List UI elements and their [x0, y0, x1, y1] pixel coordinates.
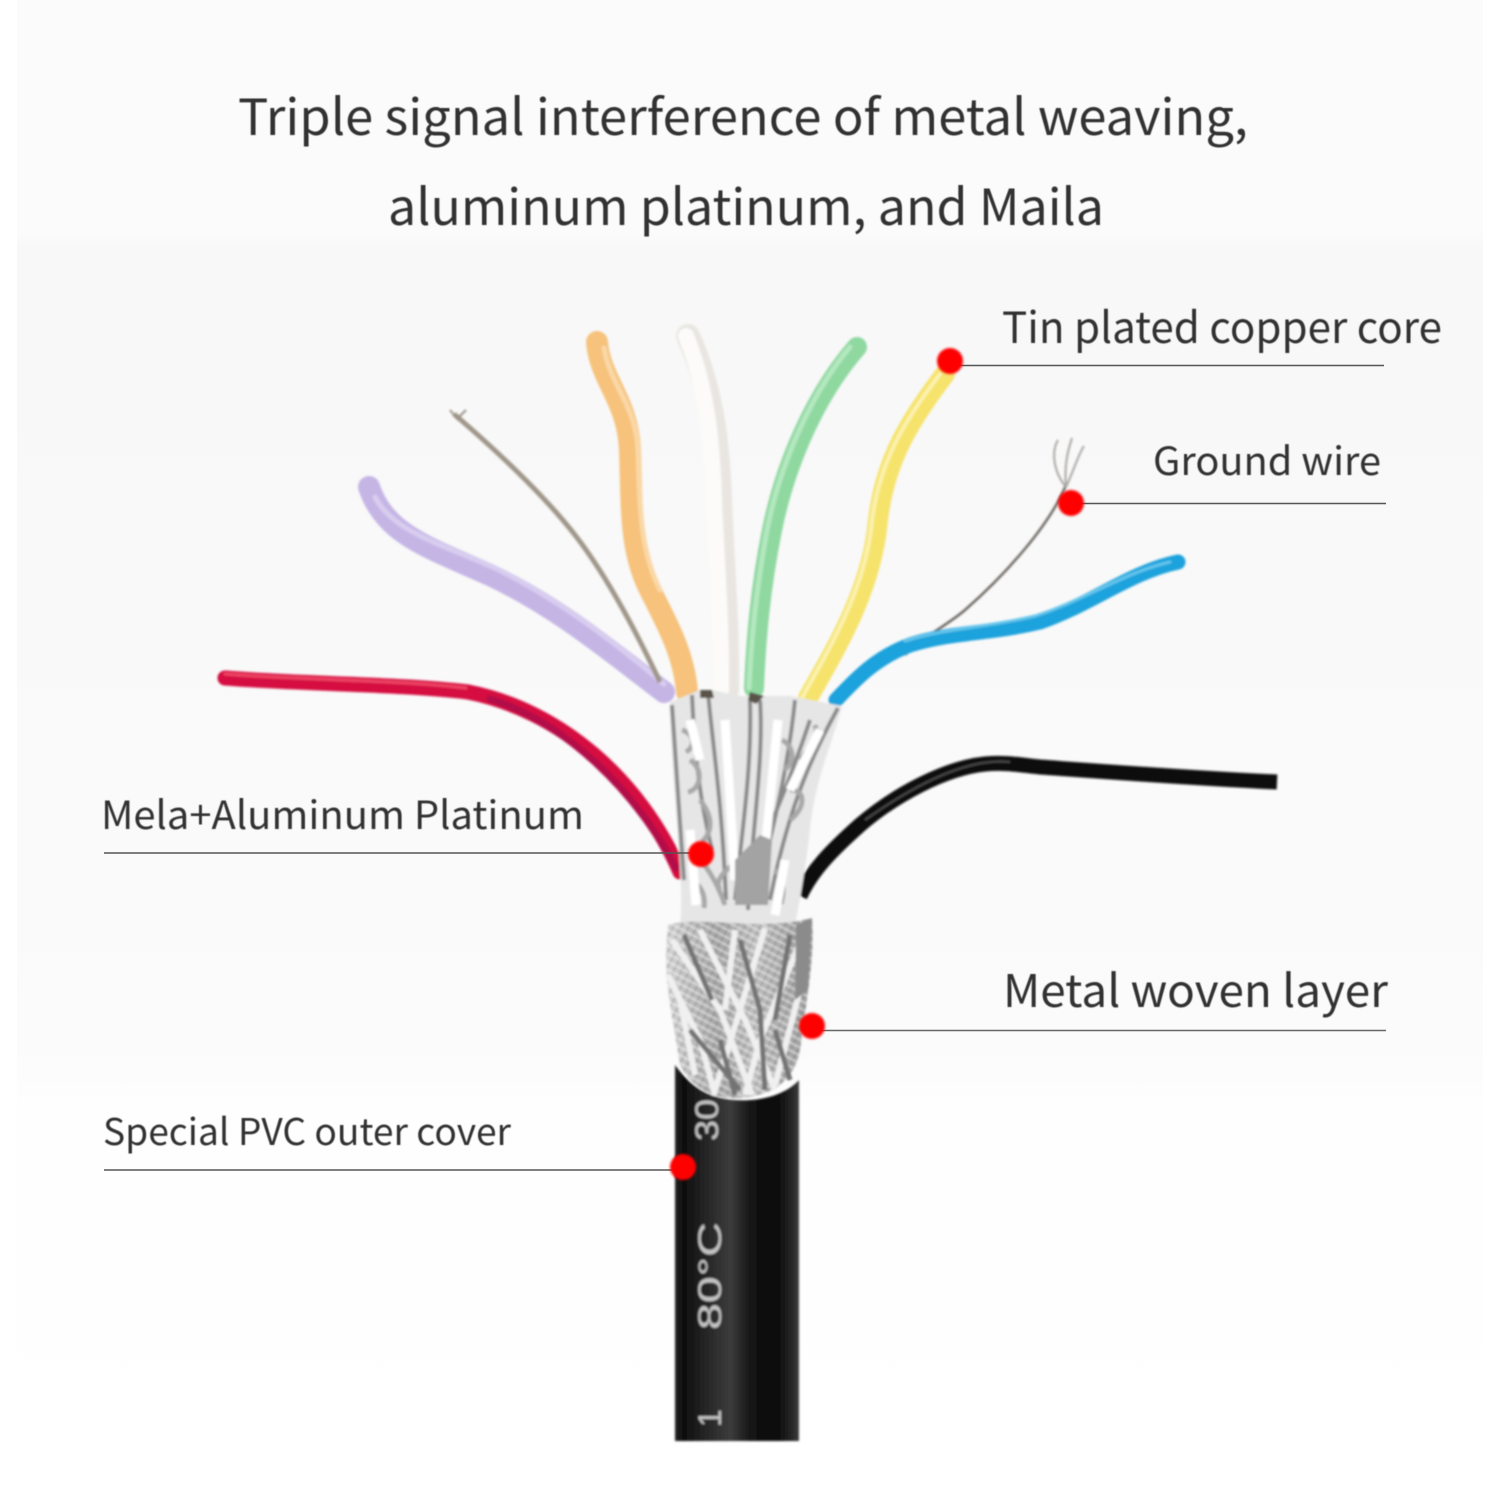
label: Metal woven layer: Metal woven layer [1003, 955, 1389, 1020]
label: Mela+Aluminum Platinum [101, 785, 714, 867]
title: aluminum platinum, and Maila [388, 168, 1104, 240]
title [238, 78, 1248, 240]
wire: thin ground right [905, 438, 1084, 655]
wire: green [749, 347, 857, 688]
wire: orange [597, 342, 687, 692]
wire: black [800, 761, 1277, 896]
label: Tin plated copper core [937, 294, 1442, 374]
wire: lavender [369, 487, 664, 692]
label: Ground wire [1058, 431, 1386, 516]
label: Mela+Aluminum Platinum: Mela+Aluminum Platinum [101, 785, 584, 841]
wire: blue [836, 562, 1178, 700]
jacket print: 1 [692, 1409, 728, 1427]
label: Ground wire: Ground wire [1153, 431, 1381, 487]
jacket print [689, 1099, 728, 1427]
black PVC jacket [675, 1065, 799, 1441]
jacket print: 80°C [692, 1222, 728, 1330]
label: Special PVC outer cover [103, 1102, 696, 1180]
metal braid [666, 918, 813, 1098]
jacket print: 30 [689, 1099, 725, 1141]
label: Metal woven layer [799, 955, 1389, 1039]
wire: thin ground left [450, 410, 660, 682]
foil shield [670, 690, 842, 925]
cable illustration [225, 336, 1277, 1441]
title: Triple signal interference of metal weaving, [238, 78, 1248, 150]
wire: red [225, 674, 680, 872]
wire: white [686, 336, 727, 690]
wire: yellow [802, 374, 945, 698]
label: Tin plated copper core: Tin plated copper core [1002, 294, 1442, 356]
label: Special PVC outer cover: Special PVC outer cover [103, 1102, 512, 1156]
